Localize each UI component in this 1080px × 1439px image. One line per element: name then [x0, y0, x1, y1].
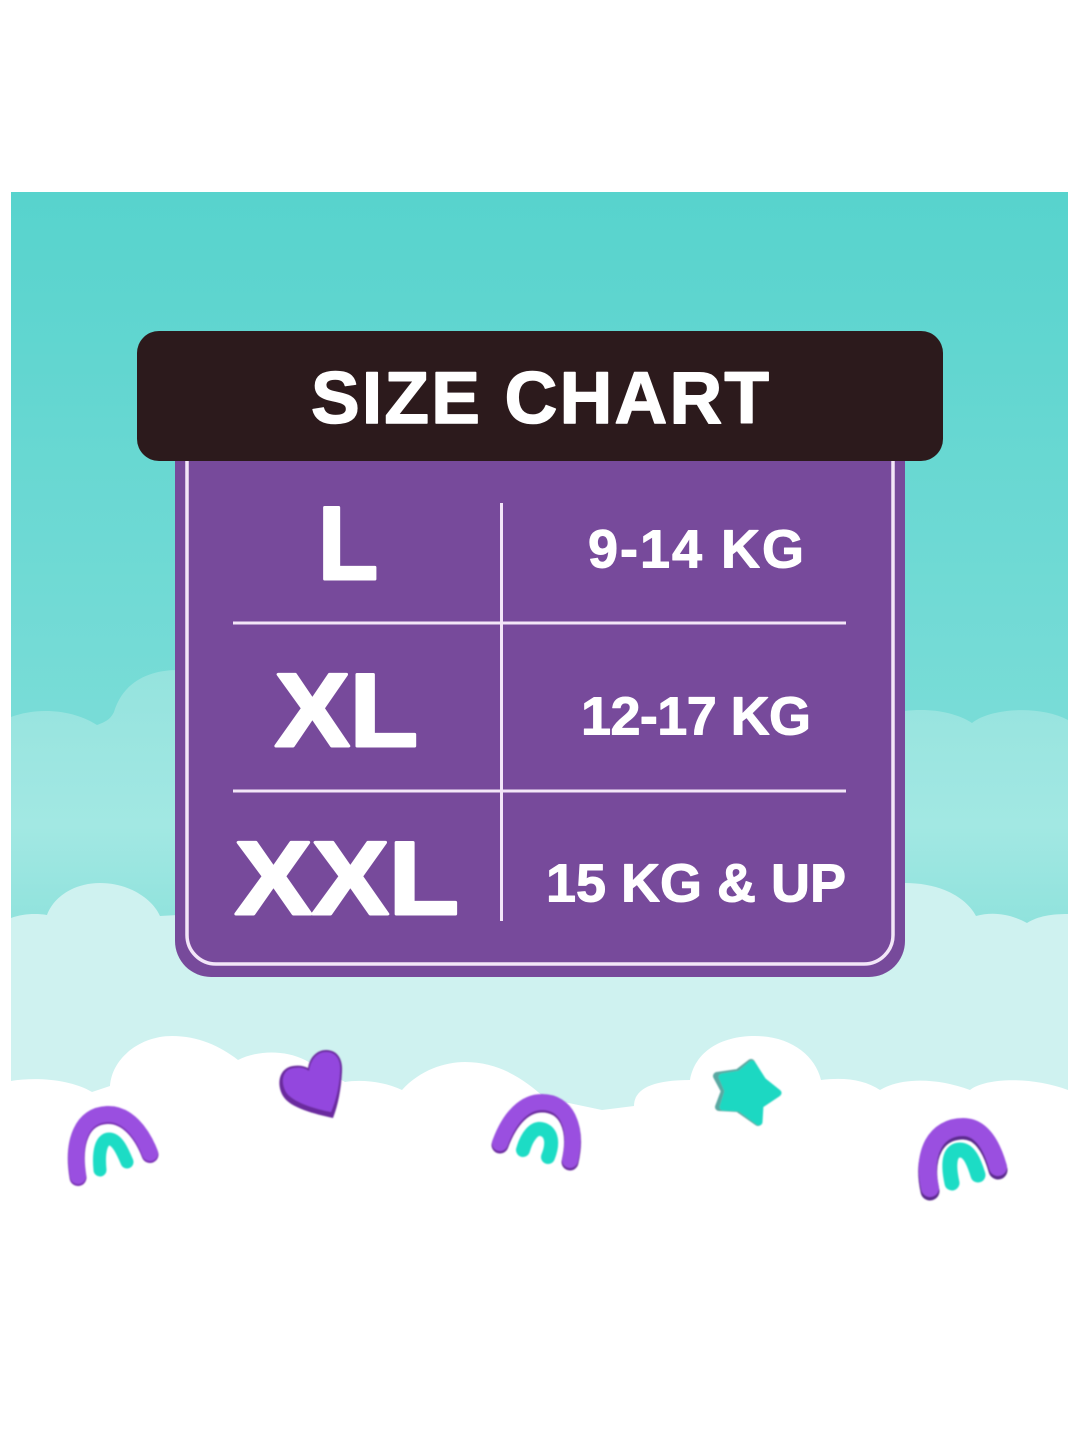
icon: star — [717, 1063, 778, 1122]
row: XXL: XXL — [235, 821, 459, 937]
row: L: 9-14 KG — [588, 520, 804, 580]
middle cloud layer — [11, 883, 1068, 1110]
icon: rainbow left — [76, 1114, 150, 1178]
back cloud layer — [11, 670, 1068, 930]
row: XL — [275, 653, 811, 769]
table grid lines — [233, 503, 846, 921]
icon: heart — [279, 1050, 342, 1118]
row: XXL: 15 KG & UP — [546, 854, 846, 914]
row: L — [318, 486, 804, 602]
front white cloud layer — [0, 1036, 1080, 1439]
size chart panel — [137, 331, 943, 977]
icon: rainbow centre — [500, 1102, 572, 1162]
panel inner outline — [187, 440, 893, 964]
row: XL: 12-17 KG — [581, 686, 811, 746]
row: XXL — [235, 821, 846, 937]
header bar — [137, 331, 943, 461]
sky background — [11, 192, 1068, 932]
icon: rainbow right — [928, 1127, 998, 1191]
row: L: L — [318, 486, 378, 602]
panel background — [175, 420, 905, 977]
row: XL: XL — [275, 653, 418, 769]
heading: SIZE CHART — [311, 358, 769, 439]
